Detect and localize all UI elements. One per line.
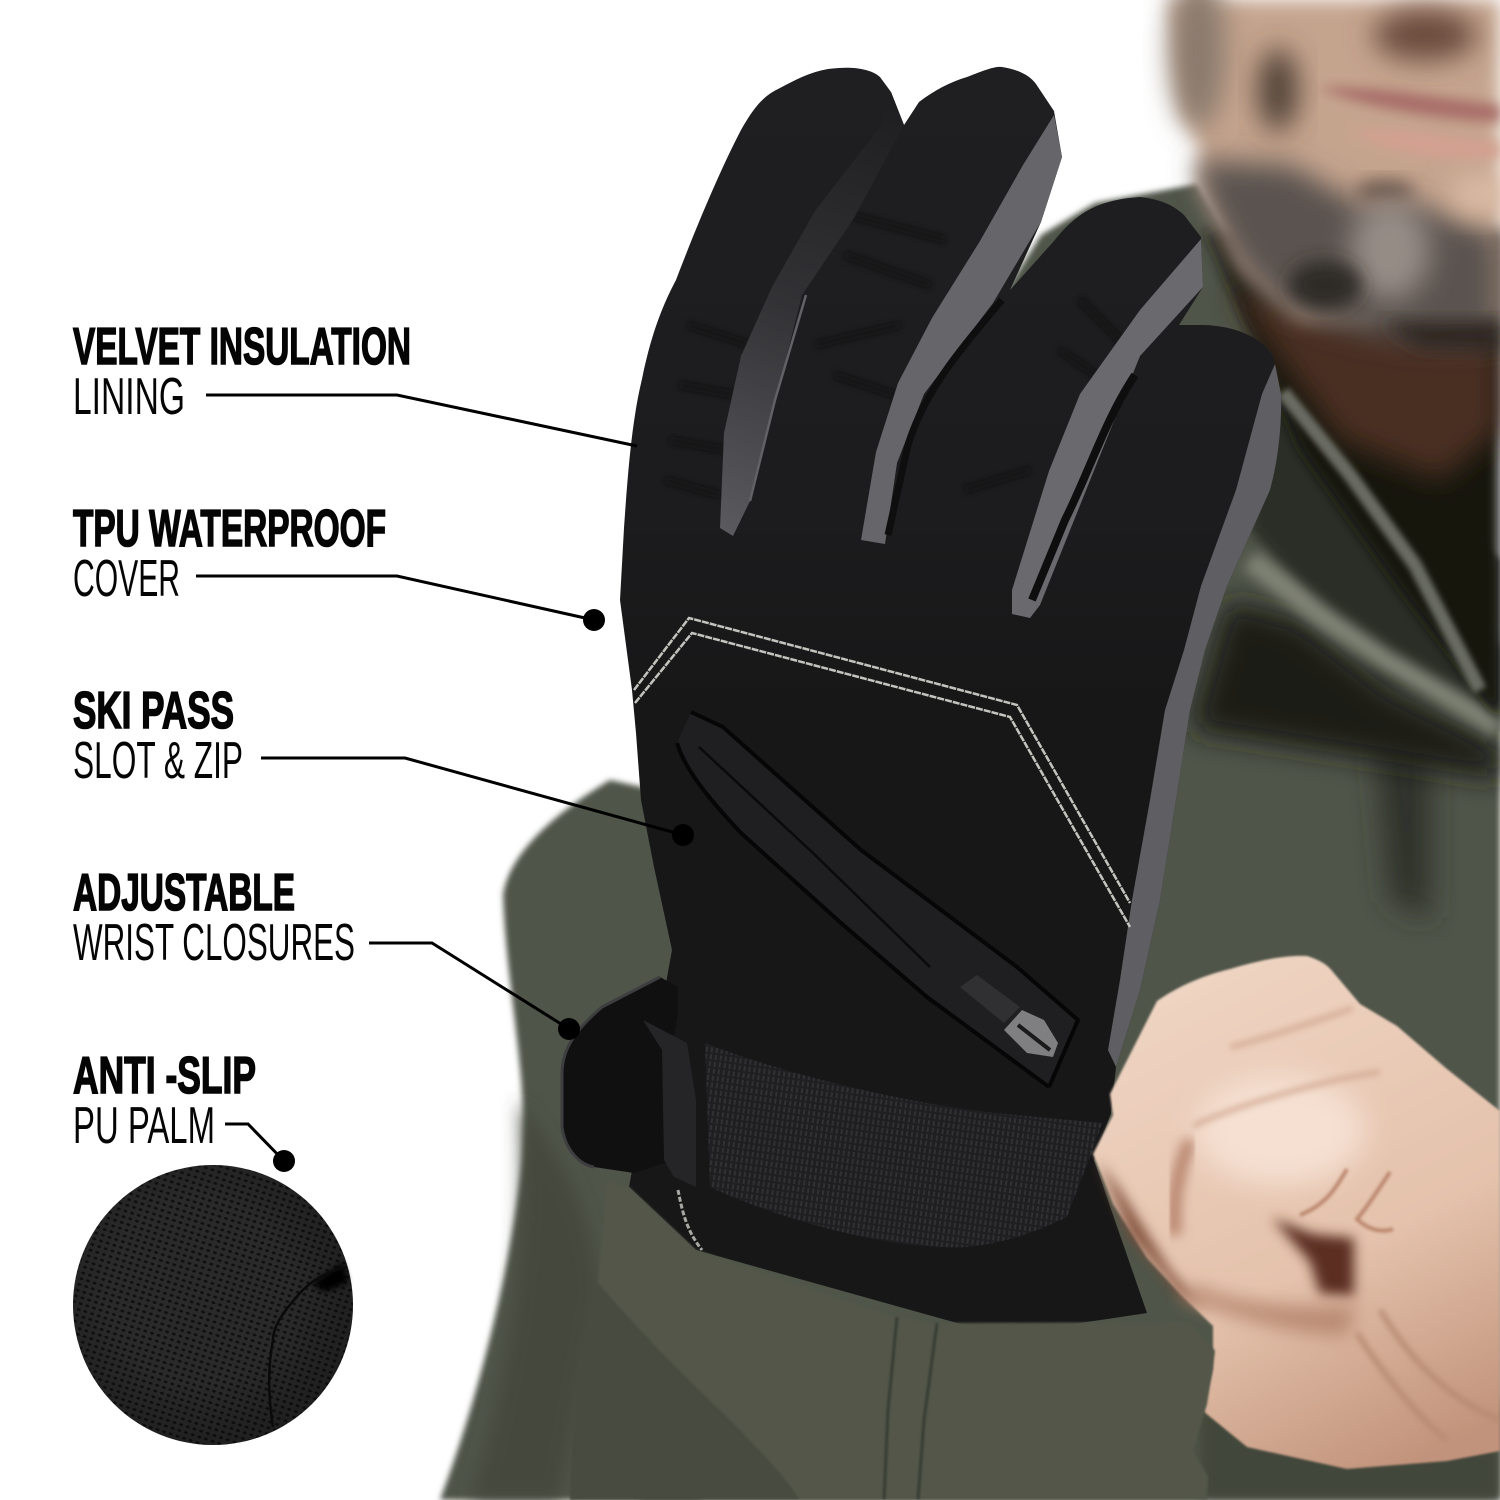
dark chest band <box>1375 740 1430 920</box>
glove body <box>620 67 1281 1335</box>
zip puller tab <box>960 975 1020 1023</box>
callout: anti-slip PU palm: PU PALM <box>73 1097 215 1155</box>
second finger gap <box>888 300 1002 535</box>
cuff centre seam <box>884 1317 937 1500</box>
grey side panel <box>1108 364 1281 1067</box>
neck skin <box>1230 290 1500 480</box>
buckle ring <box>643 1020 696 1187</box>
lower lip <box>1350 130 1500 158</box>
knuckle creases <box>1193 1008 1380 1126</box>
third finger gap <box>1032 375 1135 600</box>
callout: TPU waterproof cover: COVER <box>73 550 180 608</box>
glove <box>562 67 1281 1335</box>
lower glove stitch <box>678 1190 702 1250</box>
palm material detail circle <box>73 1165 353 1445</box>
finger wrinkles <box>665 215 1130 495</box>
thumb knuckle shadow <box>1174 1140 1190 1235</box>
callout: ski pass slot and zip: SKI PASS <box>73 682 234 740</box>
jacket cuff <box>570 1180 1215 1500</box>
right hand <box>1093 956 1500 1469</box>
palm fold shadow <box>312 1262 348 1292</box>
callout: TPU waterproof cover: TPU WATERPROOF <box>73 500 386 558</box>
lower beard shadow <box>1380 322 1500 350</box>
thumb underside <box>1180 1285 1357 1336</box>
jacket torso <box>640 184 1500 1500</box>
callout: TPU waterproof cover <box>73 500 605 631</box>
sideburn <box>1170 0 1226 130</box>
zip tape line <box>699 747 930 967</box>
chin grey patch <box>1350 200 1430 300</box>
collar black under band <box>1190 600 1500 780</box>
buckle loop <box>562 977 678 1173</box>
collar zip band <box>1283 392 1480 690</box>
callout: anti-slip PU palm <box>73 1047 295 1172</box>
edge shadow <box>1098 1160 1205 1310</box>
grey strip: first finger <box>720 92 904 536</box>
collar light band <box>1250 560 1500 728</box>
jacket lower shadow <box>1200 1400 1500 1500</box>
chin highlight <box>1450 175 1500 215</box>
collar dark lining <box>1245 400 1500 730</box>
cheek beard <box>1258 48 1298 132</box>
lips <box>1318 87 1500 122</box>
callout: ski pass slot and zip <box>73 682 694 846</box>
callout: ski pass slot and zip: SLOT & ZIP <box>73 732 243 790</box>
neck shadow <box>1205 230 1500 720</box>
zip metal slider <box>1004 1010 1058 1057</box>
callout: adjustable wrist closures: WRIST CLOSURES <box>73 914 355 972</box>
hand base <box>1093 956 1500 1469</box>
wrist strap <box>705 1043 1102 1247</box>
cuff fold <box>570 1283 800 1500</box>
callout: velvet insulation lining: LINING <box>73 368 185 426</box>
double stitching seam <box>634 618 1130 927</box>
callout: adjustable wrist closures <box>73 864 580 1040</box>
chin beard <box>1195 160 1500 343</box>
callout: velvet insulation lining: VELVET INSULATION <box>73 318 411 376</box>
strap buckle <box>562 977 696 1187</box>
face <box>1170 0 1500 350</box>
callout: adjustable wrist closures: ADJUSTABLE <box>73 864 295 922</box>
grey strip: third finger <box>1012 239 1203 618</box>
callout: velvet insulation lining <box>73 318 637 446</box>
moustache shadow <box>1373 9 1477 61</box>
photo background: man and jacket <box>440 0 1500 1500</box>
fist gap dark <box>1272 1218 1354 1296</box>
palm lines <box>1357 1310 1500 1440</box>
grey strip: second finger <box>861 115 1062 544</box>
left sleeve <box>440 780 700 1500</box>
palm seam <box>269 1267 347 1427</box>
dark beard patch <box>1289 261 1361 309</box>
zip pocket <box>677 712 1078 1087</box>
finger folds <box>1300 1169 1393 1231</box>
soul patch <box>1355 180 1415 204</box>
callout: anti-slip PU palm: ANTI -SLIP <box>73 1047 256 1105</box>
first finger seam <box>750 295 806 501</box>
bright knuckles <box>1195 1075 1365 1185</box>
sleeve shadow <box>470 1100 600 1500</box>
